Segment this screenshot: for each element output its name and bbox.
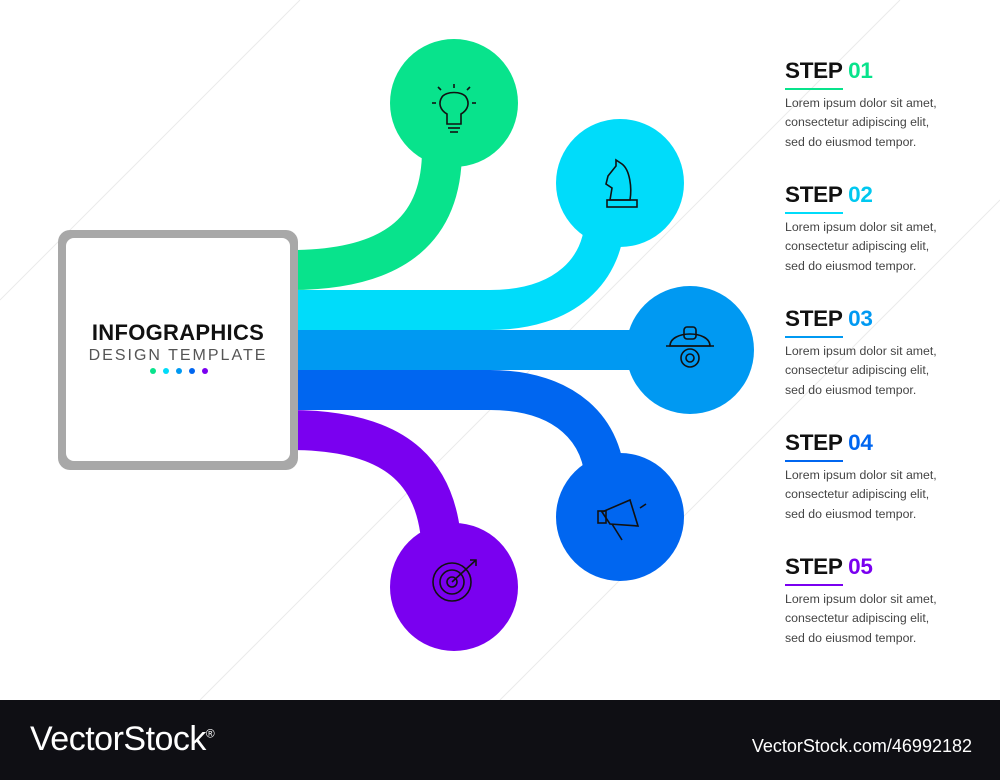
step 01 text: consectetur adipiscing elit,: [785, 115, 929, 129]
circle: step 3 helmet gear: [626, 286, 754, 414]
step 04 text: sed do eiusmod tempor.: [785, 507, 916, 521]
step 05 text: sed do eiusmod tempor.: [785, 631, 916, 645]
step 03 text: consectetur adipiscing elit,: [785, 363, 929, 377]
step 01 text: Lorem ipsum dolor sit amet,: [785, 96, 937, 110]
step 04 text: consectetur adipiscing elit,: [785, 487, 929, 501]
step 05 text: consectetur adipiscing elit,: [785, 611, 929, 625]
step 05 text: Lorem ipsum dolor sit amet,: [785, 592, 937, 606]
band: step 1: [290, 150, 442, 270]
dots: [150, 368, 208, 374]
band: step 2: [290, 215, 605, 310]
step 04 text: STEP 04: [785, 430, 873, 455]
step 02 text: sed do eiusmod tempor.: [785, 259, 916, 273]
circle: step 1 lightbulb: [390, 39, 518, 167]
step 03 text: sed do eiusmod tempor.: [785, 383, 916, 397]
step 04 text: Lorem ipsum dolor sit amet,: [785, 468, 937, 482]
band: step 5: [290, 430, 442, 560]
circle: step 4 megaphone: [556, 453, 684, 581]
footer url: VectorStock.com/46992182: [752, 736, 972, 756]
center title box: [58, 230, 298, 470]
step 05 text: [785, 554, 937, 645]
step 01 text: sed do eiusmod tempor.: [785, 135, 916, 149]
step 05 text: STEP 05: [785, 554, 873, 579]
step 03 text: [785, 306, 937, 397]
step 03 text: STEP 03: [785, 306, 873, 331]
circle: step 2 chess knight: [556, 119, 684, 247]
step 03 text: Lorem ipsum dolor sit amet,: [785, 344, 937, 358]
step 02 text: Lorem ipsum dolor sit amet,: [785, 220, 937, 234]
step 01 text: STEP 01: [785, 58, 873, 83]
footer bar: [0, 700, 1000, 780]
band: step 3: [290, 330, 690, 370]
step 02 text: STEP 02: [785, 182, 873, 207]
step 02 text: [785, 182, 937, 273]
footer logo: VectorStock®: [30, 720, 214, 758]
step 01 text: [785, 58, 937, 149]
step 04 text: [785, 430, 937, 521]
band: step 4: [290, 390, 605, 485]
heading: INFOGRAPHICS: [92, 320, 264, 345]
circle: step 5 target: [390, 523, 518, 651]
step 02 text: consectetur adipiscing elit,: [785, 239, 929, 253]
subheading: DESIGN TEMPLATE: [89, 347, 267, 364]
